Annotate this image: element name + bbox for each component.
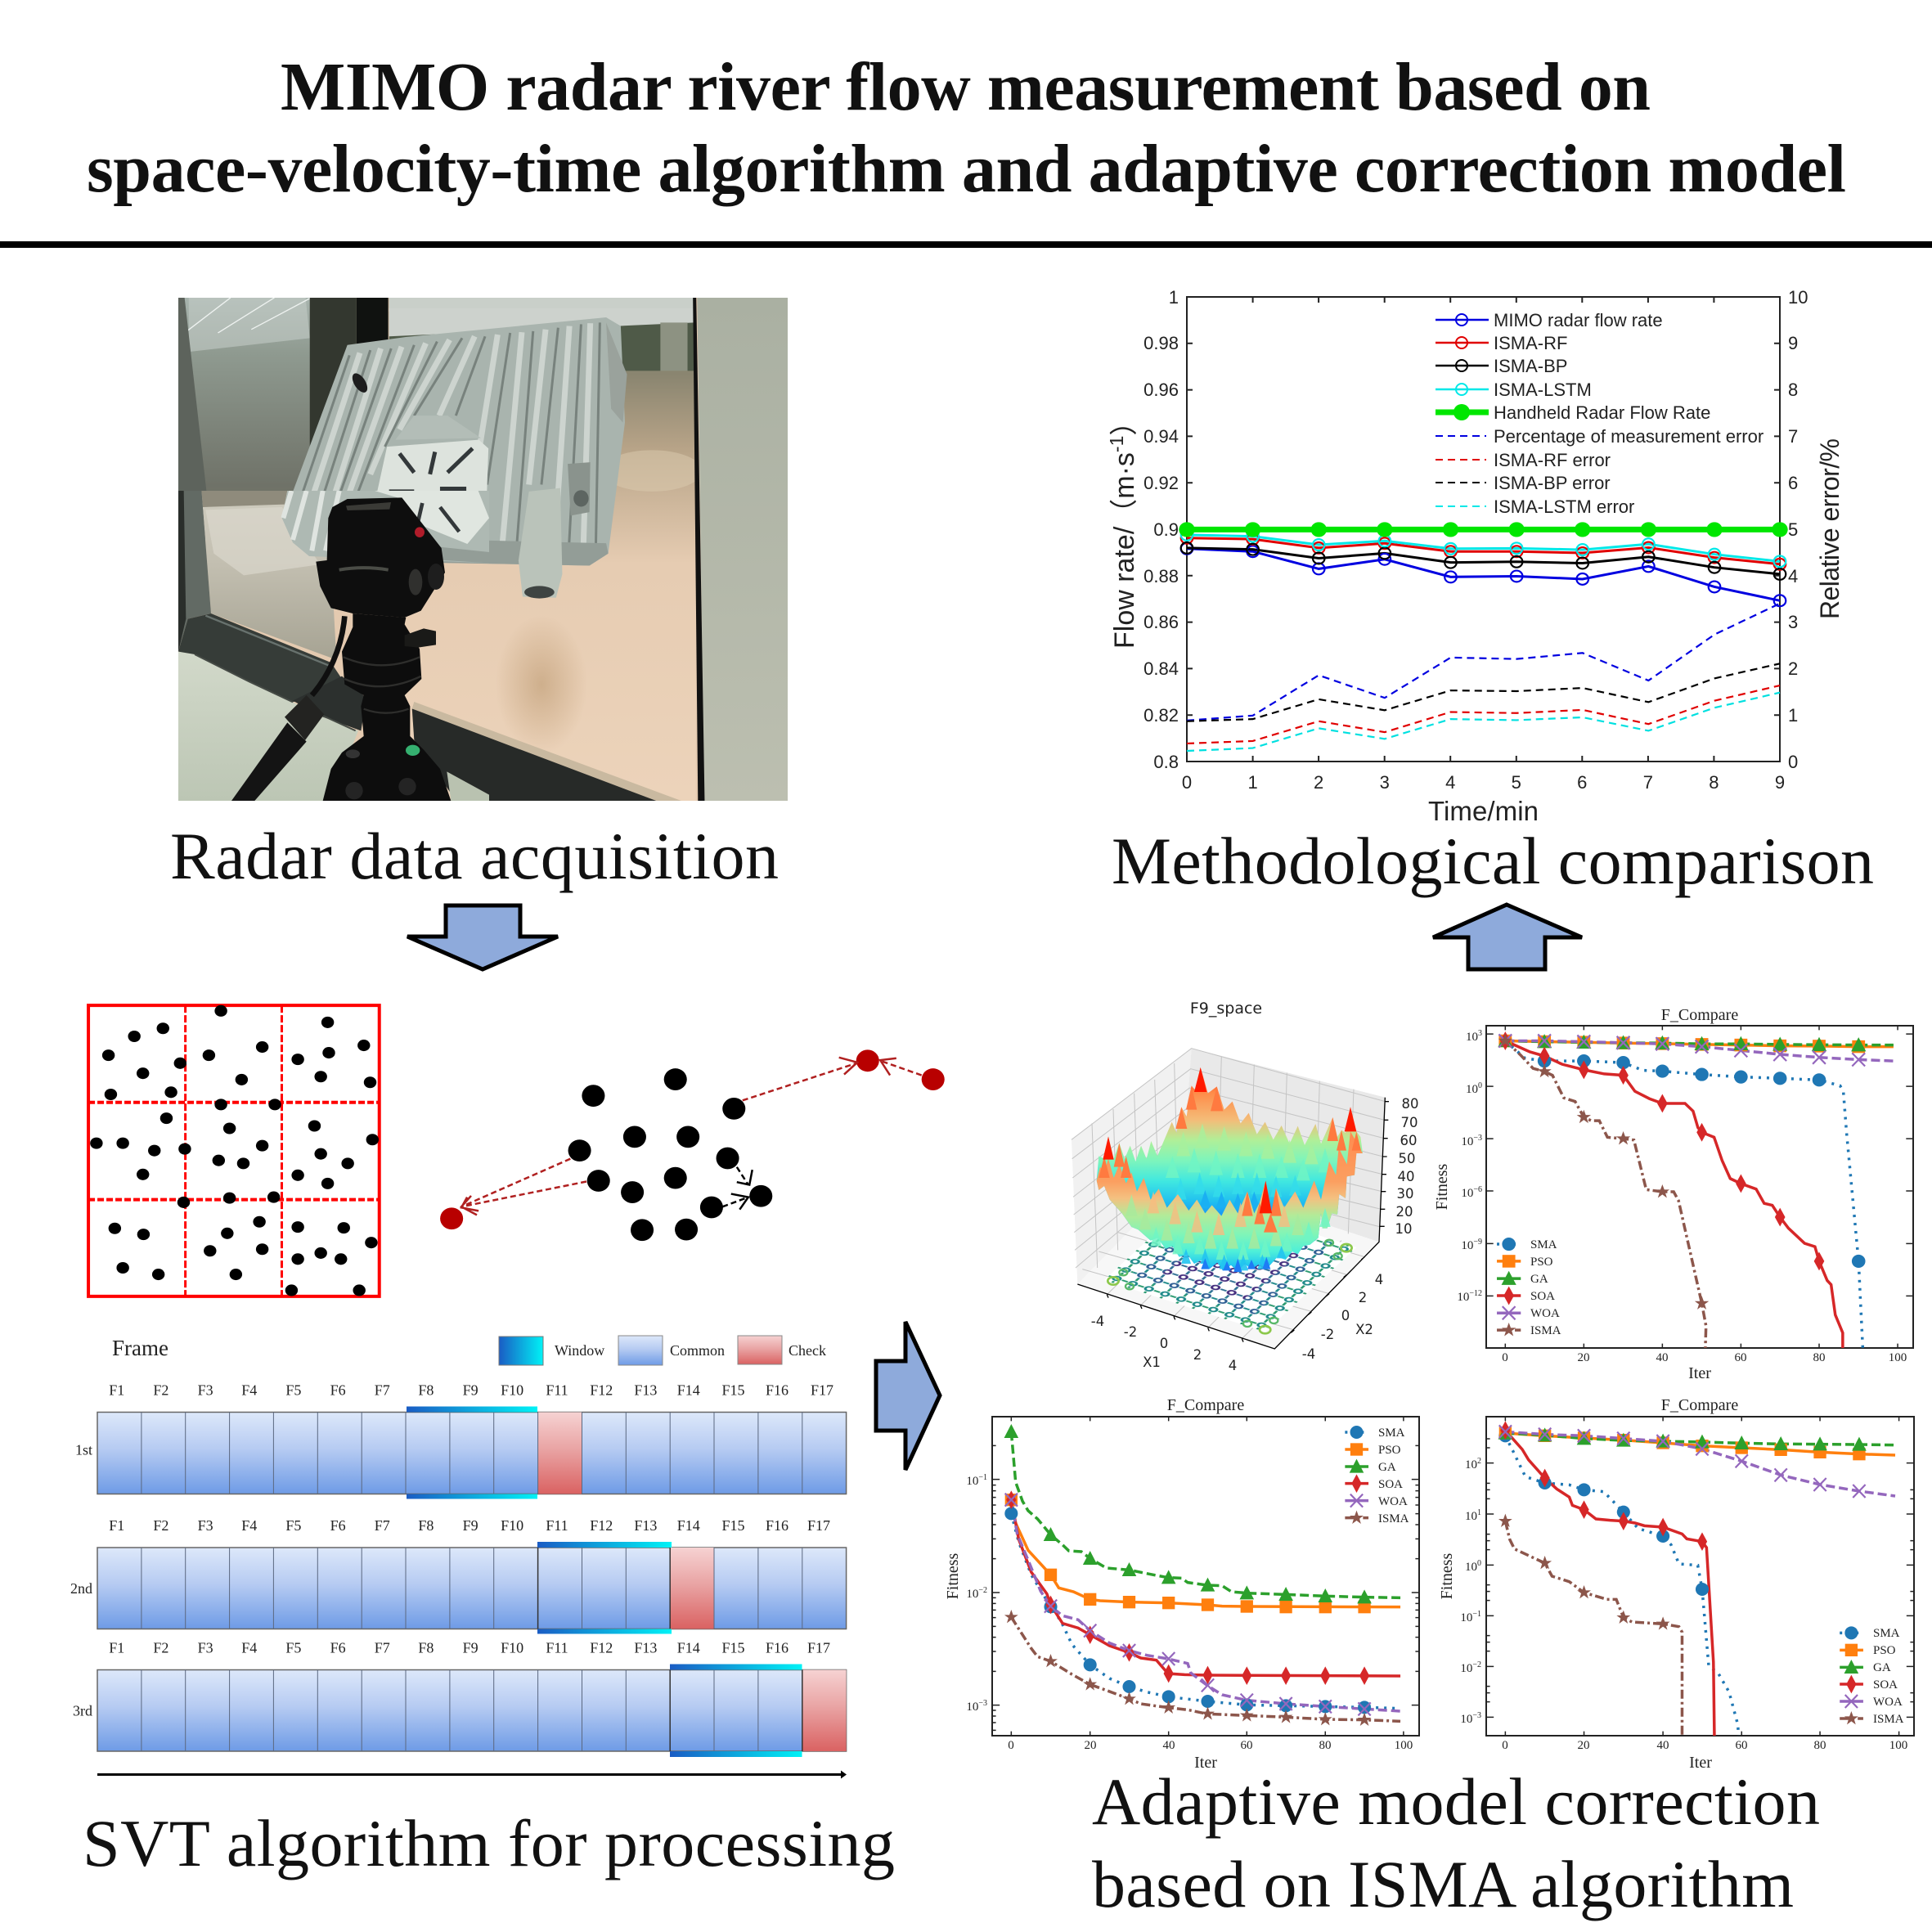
photo lower left: window, sill and tripod	[178, 491, 489, 801]
chart text: WOA	[1378, 1495, 1408, 1508]
row 3rd: F5	[285, 1639, 301, 1656]
chart text: 80	[1319, 1739, 1332, 1752]
mounting bracket	[375, 416, 488, 545]
chart text: 10	[966, 1701, 978, 1714]
dashed arrows	[461, 1058, 922, 1215]
axis tick labels: 60	[1400, 1133, 1417, 1148]
chart text: GA	[1530, 1273, 1548, 1286]
chart text	[1433, 1029, 1907, 1382]
chart text: −1	[978, 1473, 987, 1482]
row 3rd: F16	[766, 1639, 789, 1656]
left axis labels: 0.92	[1143, 473, 1179, 493]
right axis title: Relative error/%	[1815, 438, 1844, 619]
right axis labels: 2	[1788, 658, 1798, 679]
chart plot	[1485, 1416, 1915, 1737]
lower window frame right	[412, 702, 681, 801]
chart legend: MIMO radar flow rate	[1494, 310, 1663, 330]
row 3rd: F1	[109, 1639, 124, 1656]
left axis title: Flow rate/（m·s	[1109, 452, 1140, 649]
chart text: SOA	[1378, 1478, 1403, 1491]
table legend	[499, 1336, 826, 1365]
surface spikes	[1099, 1067, 1361, 1272]
chart text: −2	[978, 1586, 987, 1595]
left axis labels: 0.98	[1143, 333, 1179, 353]
row 1st: F9	[463, 1382, 479, 1399]
chart text: 10	[1465, 1510, 1477, 1523]
chart text: 20	[1577, 1351, 1590, 1364]
title	[87, 49, 1846, 207]
row 1st: F3	[198, 1382, 213, 1399]
row 1st: F8	[418, 1382, 434, 1399]
row 3rd	[73, 1639, 847, 1757]
chart text: 10	[1466, 1083, 1478, 1096]
panel: F9 3D surface plot	[1072, 1000, 1418, 1373]
label: SVT algorithm: SVT algorithm for processing	[83, 1806, 895, 1880]
chart text: 10	[1466, 1031, 1478, 1044]
chart text: 10	[966, 1475, 978, 1488]
row 3rd: F8	[418, 1639, 434, 1656]
axis tick labels: 40	[1397, 1169, 1415, 1184]
chart text: 10	[1460, 1713, 1472, 1726]
tripod	[231, 497, 451, 801]
chart text: SMA	[1378, 1427, 1405, 1440]
chart text: 60	[1734, 1351, 1747, 1364]
row 2nd: F2	[153, 1517, 168, 1534]
red grid	[88, 1005, 380, 1296]
grid points	[90, 1005, 379, 1296]
chart title: F_Compare	[1661, 1396, 1738, 1414]
left axis labels	[1143, 287, 1179, 772]
chart text: 0	[1008, 1739, 1014, 1752]
chart text: PSO	[1378, 1444, 1401, 1457]
left axis title: -1	[1106, 436, 1127, 452]
chart text: 40	[1656, 1351, 1669, 1364]
right axis labels: 8	[1788, 380, 1798, 400]
row 1st: F17	[811, 1382, 833, 1399]
chart text: 100	[1889, 1739, 1907, 1752]
row 1st: F14	[677, 1382, 700, 1399]
right axis labels: 0	[1788, 752, 1798, 772]
chart text: 0	[1478, 1081, 1482, 1090]
row 2nd: F4	[241, 1517, 257, 1534]
panel: convergence chart bottom right	[1438, 1396, 1914, 1772]
chart title: F_Compare	[1661, 1006, 1738, 1024]
axis tick labels: 2	[1193, 1347, 1202, 1363]
chart text: SMA	[1873, 1627, 1900, 1640]
right axis labels: 9	[1788, 333, 1798, 353]
right axis labels: 4	[1788, 566, 1798, 586]
left axis labels: 0.9	[1153, 519, 1179, 540]
photo background and radar	[178, 298, 788, 801]
row 2nd: 2nd	[70, 1580, 92, 1597]
row 3rd: 3rd	[73, 1703, 92, 1719]
row 2nd: F10	[501, 1517, 523, 1534]
row 3rd: F6	[330, 1639, 346, 1656]
outlier dots	[440, 1049, 945, 1229]
axis lines	[1077, 1098, 1389, 1349]
row 3rd: F11	[546, 1639, 568, 1656]
chart text: −2	[1472, 1660, 1481, 1669]
arrow: down to SVT	[407, 905, 558, 969]
chart text: 10	[1460, 1662, 1472, 1675]
row 2nd: F8	[418, 1517, 434, 1534]
chart text: 10	[966, 1588, 978, 1601]
chart text: Fitness	[944, 1552, 962, 1599]
chart text: −12	[1469, 1289, 1482, 1298]
left axis labels: 0.84	[1143, 658, 1179, 679]
chart text: 100	[1395, 1739, 1413, 1752]
chart text: WOA	[1873, 1696, 1903, 1709]
row 2nd: F7	[375, 1517, 390, 1534]
chart text: −1	[1472, 1610, 1481, 1619]
surface front wall	[1097, 1131, 1363, 1272]
chart text: 20	[1085, 1739, 1096, 1752]
row 3rd: F2	[153, 1639, 168, 1656]
x axis labels: 8	[1709, 772, 1719, 793]
row 2nd: F6	[330, 1517, 346, 1534]
axis tick labels	[1091, 1096, 1418, 1373]
chart text: 60	[1736, 1739, 1747, 1752]
contour floor	[1104, 1196, 1356, 1333]
chart text: −9	[1473, 1238, 1482, 1247]
left axis labels: 0.86	[1143, 612, 1179, 632]
chart text: 60	[1240, 1739, 1253, 1752]
chart text: ISMA	[1378, 1512, 1409, 1525]
left axis labels: 1	[1169, 287, 1179, 308]
chart text: GA	[1378, 1461, 1396, 1474]
axis tick labels: 4	[1229, 1358, 1237, 1373]
panel: radar photo	[178, 298, 788, 801]
row 1st: F12	[590, 1382, 613, 1399]
x axis labels	[1182, 772, 1785, 793]
chart text: −3	[1472, 1711, 1481, 1720]
chart text	[944, 1427, 1413, 1772]
label: radar data acquisition: Radar data acquisition	[170, 819, 779, 893]
row 3rd: F4	[241, 1639, 257, 1656]
row 2nd: F16	[766, 1517, 789, 1534]
row 2nd: F9	[463, 1517, 479, 1534]
left axis labels: 0.88	[1143, 566, 1179, 586]
axis tick labels: -2	[1124, 1324, 1137, 1340]
panel: SVT clustering diagram	[87, 1004, 1889, 1719]
row 2nd: F14	[677, 1517, 700, 1534]
axis tick labels: -2	[1321, 1327, 1334, 1342]
chart text: 10	[1465, 1458, 1477, 1471]
chart text: 40	[1657, 1739, 1669, 1752]
cluster dots	[568, 1068, 772, 1241]
chart text: 0	[1477, 1559, 1481, 1568]
table heading: Frame	[112, 1336, 168, 1360]
row 3rd: F9	[463, 1639, 479, 1656]
label: adaptive model correction	[1092, 1764, 1820, 1921]
chart text: WOA	[1530, 1307, 1560, 1320]
axis tick labels: 50	[1399, 1151, 1415, 1166]
chart legend: ISMA-BP	[1494, 356, 1567, 376]
chart text: SMA	[1530, 1238, 1557, 1251]
row 3rd: F15	[721, 1639, 745, 1656]
chart series	[1179, 522, 1788, 753]
chart text: 10	[1460, 1611, 1472, 1624]
row 2nd: F13	[634, 1517, 657, 1534]
chart text: −3	[1473, 1134, 1482, 1143]
x axis labels: 4	[1445, 772, 1455, 793]
axis tick labels: 0	[1341, 1308, 1350, 1323]
radar enclosure	[283, 317, 627, 566]
table legend: Check	[789, 1342, 826, 1359]
axis tick labels: 30	[1397, 1186, 1413, 1202]
right axis labels: 5	[1788, 519, 1798, 540]
panel: convergence chart bottom left	[944, 1396, 1419, 1772]
row 1st: F13	[634, 1382, 657, 1399]
row 3rd: F7	[375, 1639, 390, 1656]
chart text: 2	[1477, 1457, 1481, 1466]
left axis title: ）	[1109, 408, 1140, 436]
x axis labels: 2	[1314, 772, 1323, 793]
row 3rd: F10	[501, 1639, 523, 1656]
x axis labels: 5	[1512, 772, 1521, 793]
chart text: 10	[1457, 1291, 1469, 1304]
axis tick labels: 4	[1375, 1272, 1383, 1287]
panel: convergence chart top right	[1433, 1006, 1913, 1382]
chart legend: ISMA-LSTM	[1494, 380, 1592, 400]
row 2nd: F1	[109, 1517, 124, 1534]
row 2nd: F5	[285, 1517, 301, 1534]
plot title: F9_space	[1190, 1000, 1262, 1018]
chart legend: Percentage of measurement error	[1494, 426, 1764, 447]
chart text: GA	[1873, 1661, 1891, 1674]
label: adaptive model correction: Adaptive model correction	[1092, 1764, 1820, 1839]
chart text: ISMA	[1873, 1713, 1904, 1726]
axis tick labels: 2	[1359, 1290, 1367, 1305]
right axis labels	[1788, 287, 1808, 772]
title: space-velocity-time algorithm and adaptive correction model	[87, 131, 1846, 207]
row 1st	[75, 1382, 847, 1498]
row 1st: F2	[153, 1382, 168, 1399]
chart legend: ISMA-RF error	[1494, 450, 1611, 470]
row 1st: F15	[721, 1382, 745, 1399]
chart text: 3	[1478, 1029, 1482, 1038]
axis tick labels: 80	[1402, 1096, 1418, 1112]
chart legend: ISMA-BP error	[1494, 473, 1611, 493]
axis tick labels: X2	[1355, 1322, 1373, 1337]
row 1st: F7	[375, 1382, 390, 1399]
chart title: F_Compare	[1167, 1396, 1244, 1414]
row 2nd: F11	[546, 1517, 568, 1534]
chart text: PSO	[1873, 1644, 1896, 1657]
cable gland	[519, 462, 591, 599]
axis tick labels: 10	[1395, 1221, 1412, 1237]
3D surface	[1072, 1048, 1389, 1350]
chart text: 40	[1163, 1739, 1175, 1752]
row 1st: F4	[241, 1382, 257, 1399]
chart plot	[1485, 1025, 1914, 1349]
row 2nd: F15	[721, 1517, 745, 1534]
chart text: 10	[1465, 1561, 1477, 1574]
panel: sliding window frames	[70, 1336, 847, 1778]
axis tick labels: -4	[1302, 1346, 1315, 1362]
table legend: Common	[670, 1342, 725, 1359]
right axis labels: 1	[1788, 705, 1798, 726]
row 1st: F11	[546, 1382, 568, 1399]
row 3rd: F13	[634, 1639, 657, 1656]
right axis labels: 10	[1788, 287, 1808, 308]
surface mid texture	[1166, 1123, 1332, 1209]
chart text: Iter	[1194, 1754, 1217, 1772]
chart text: ISMA	[1530, 1324, 1561, 1337]
axis tick labels: 20	[1395, 1204, 1413, 1220]
row 3rd: F3	[198, 1639, 213, 1656]
axis tick labels: -4	[1091, 1314, 1104, 1329]
x axis labels: 6	[1577, 772, 1587, 793]
axis tick labels: X1	[1143, 1355, 1161, 1370]
x axis labels: 0	[1182, 772, 1192, 793]
right axis labels: 7	[1788, 426, 1798, 447]
x axis title: Time/min	[1428, 796, 1539, 826]
axis tick labels: 70	[1400, 1115, 1418, 1130]
chart text: 80	[1813, 1351, 1826, 1364]
chart legend: Handheld Radar Flow Rate	[1494, 402, 1710, 423]
arrow: up to comparison	[1433, 905, 1582, 969]
chart text: 10	[1461, 1187, 1473, 1200]
title: MIMO radar river flow measurement based on	[281, 49, 1651, 125]
axis tick labels: 0	[1160, 1336, 1168, 1351]
left axis labels: 0.94	[1143, 426, 1179, 447]
row 3rd: F17	[807, 1639, 830, 1656]
row 1st: F16	[766, 1382, 789, 1399]
chart text: 10	[1461, 1135, 1473, 1148]
chart text: 0	[1502, 1351, 1508, 1364]
row 2nd: F17	[807, 1517, 830, 1534]
chart text: 10	[1461, 1239, 1473, 1252]
chart legend: ISMA-LSTM error	[1494, 496, 1634, 517]
row 2nd: F3	[198, 1517, 213, 1534]
chart text: SOA	[1530, 1290, 1555, 1303]
x axis labels: 7	[1643, 772, 1653, 793]
row 1st: F10	[501, 1382, 523, 1399]
chart text: 20	[1577, 1739, 1590, 1752]
x axis labels: 3	[1380, 772, 1390, 793]
row 2nd: F12	[590, 1517, 613, 1534]
row 1st: F6	[330, 1382, 346, 1399]
chart text: 0	[1502, 1739, 1508, 1752]
chart text: PSO	[1530, 1256, 1553, 1269]
chart text	[1438, 1457, 1907, 1772]
title divider rule	[0, 241, 1932, 248]
x axis labels: 9	[1775, 772, 1785, 793]
panel: flow rate line chart	[1106, 287, 1844, 826]
chart axes frame	[1187, 297, 1780, 762]
chart text: −3	[978, 1699, 987, 1708]
chart text: Iter	[1689, 1754, 1712, 1772]
chart text: −6	[1473, 1185, 1482, 1194]
time arrow	[97, 1770, 847, 1778]
chart text: Iter	[1688, 1364, 1711, 1382]
row 3rd: F12	[590, 1639, 613, 1656]
chart legend: ISMA-RF	[1494, 333, 1567, 353]
left axis labels: 0.82	[1143, 705, 1179, 726]
row 2nd	[70, 1517, 847, 1634]
chart text: SOA	[1873, 1678, 1898, 1692]
chart plot	[991, 1416, 1420, 1737]
surface back wall	[1097, 1067, 1363, 1272]
chart text: Fitness	[1433, 1163, 1451, 1210]
left axis labels: 0.8	[1153, 752, 1179, 772]
chart text: 1	[1477, 1508, 1481, 1517]
chart legend	[1436, 310, 1764, 517]
row 1st: F1	[109, 1382, 124, 1399]
row 3rd: F14	[677, 1639, 700, 1656]
left axis labels: 0.96	[1143, 380, 1179, 400]
label: methodological comparison: Methodological comparison	[1112, 824, 1874, 898]
right axis labels: 6	[1788, 473, 1798, 493]
chart text: 100	[1889, 1351, 1907, 1364]
table legend: Window	[555, 1342, 604, 1359]
right axis labels: 3	[1788, 612, 1798, 632]
row 1st: 1st	[75, 1441, 92, 1458]
label: adaptive model correction: based on ISMA algorithm	[1092, 1847, 1794, 1921]
arrow: right to adaptive model	[876, 1322, 940, 1470]
x axis labels: 1	[1247, 772, 1258, 793]
row 1st: F5	[285, 1382, 301, 1399]
chart text: 80	[1814, 1739, 1826, 1752]
chart text: Fitness	[1438, 1552, 1456, 1599]
